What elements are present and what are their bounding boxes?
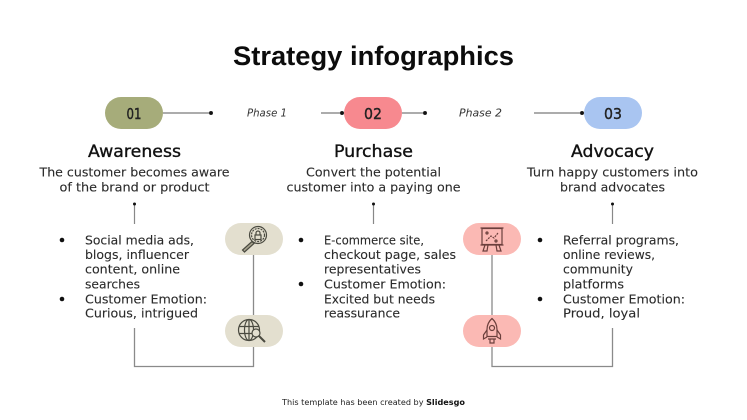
step badge 02 bbox=[344, 97, 402, 129]
step badge 01: 01 bbox=[126, 105, 142, 123]
bullet list: advocacy: Referral programs, bbox=[563, 232, 679, 248]
pointer: purchase bbox=[372, 202, 375, 224]
bullet list: awareness: content, online bbox=[85, 262, 180, 276]
bullet list: awareness: blogs, influencer bbox=[85, 247, 190, 262]
bullet list: purchase: reassurance bbox=[324, 306, 400, 320]
description: advocacy: Turn happy customers into bbox=[526, 164, 698, 180]
panel: advocacy bbox=[526, 142, 698, 320]
connector: awareness to purchase icons bbox=[134, 255, 254, 366]
panel: awareness bbox=[38, 142, 230, 320]
phase 1 label: Phase 1 bbox=[247, 108, 287, 120]
bullet list: purchase: checkout page, sales bbox=[324, 247, 456, 262]
step badge 02: 02 bbox=[364, 105, 382, 123]
heading: advocacy: Advocacy bbox=[571, 142, 654, 161]
connector: step 02 to phase 2 bbox=[402, 111, 427, 115]
icon: search lock bbox=[225, 223, 283, 255]
description: awareness: of the brand or product bbox=[60, 180, 210, 194]
connector: phase 2 to step 03 bbox=[534, 111, 584, 115]
bullet list: purchase bbox=[299, 232, 456, 320]
bullet list: awareness: Curious, intrigued bbox=[85, 306, 198, 320]
connector: step 01 to phase 1 bbox=[163, 111, 213, 115]
description: advocacy: brand advocates bbox=[560, 180, 665, 194]
heading: awareness: Awareness bbox=[88, 142, 181, 161]
description: purchase: customer into a paying one bbox=[286, 180, 461, 194]
bullet list: purchase: Customer Emotion: bbox=[324, 276, 446, 292]
description: awareness bbox=[38, 164, 230, 194]
bullet list: advocacy: platforms bbox=[563, 276, 624, 292]
icon: globe search bbox=[225, 315, 283, 347]
description: awareness: The customer becomes aware bbox=[38, 164, 230, 180]
heading: purchase: Purchase bbox=[334, 142, 413, 161]
footer credit: This template has been created by Slidesgo bbox=[281, 398, 465, 407]
bullet list: advocacy: online reviews, bbox=[563, 247, 655, 262]
description: advocacy bbox=[526, 164, 698, 194]
step badge 03: 03 bbox=[604, 105, 622, 123]
description: purchase: Convert the potential bbox=[306, 164, 441, 180]
icon: strategy board bbox=[463, 223, 521, 255]
panel: purchase bbox=[286, 142, 461, 320]
pointer: advocacy bbox=[611, 202, 614, 224]
connector: phase 1 to step 02 bbox=[321, 111, 344, 115]
pointer: awareness bbox=[133, 202, 136, 224]
bullet list: purchase: Excited but needs bbox=[324, 292, 435, 306]
connector: purchase to advocacy icons bbox=[492, 255, 612, 366]
bullet list: purchase: E-commerce site, bbox=[324, 232, 424, 248]
bullet list: advocacy: Proud, loyal bbox=[563, 306, 640, 320]
bullet list: advocacy: Customer Emotion: bbox=[563, 292, 685, 306]
bullet list: awareness: Customer Emotion: bbox=[85, 292, 207, 306]
phase 2 label: Phase 2 bbox=[459, 108, 502, 120]
step badge 03 bbox=[584, 97, 642, 129]
bullet list: awareness bbox=[60, 232, 207, 320]
bullet list: advocacy: community bbox=[563, 262, 634, 276]
bullet list: advocacy bbox=[538, 232, 685, 320]
title: Strategy infographics bbox=[233, 41, 514, 71]
bullet list: awareness: searches bbox=[85, 276, 140, 292]
description: purchase bbox=[286, 164, 461, 194]
bullet list: purchase: representatives bbox=[324, 262, 421, 276]
step badge 01 bbox=[105, 97, 163, 129]
bullet list: awareness: Social media ads, bbox=[85, 232, 194, 248]
icon: rocket bbox=[463, 315, 521, 347]
